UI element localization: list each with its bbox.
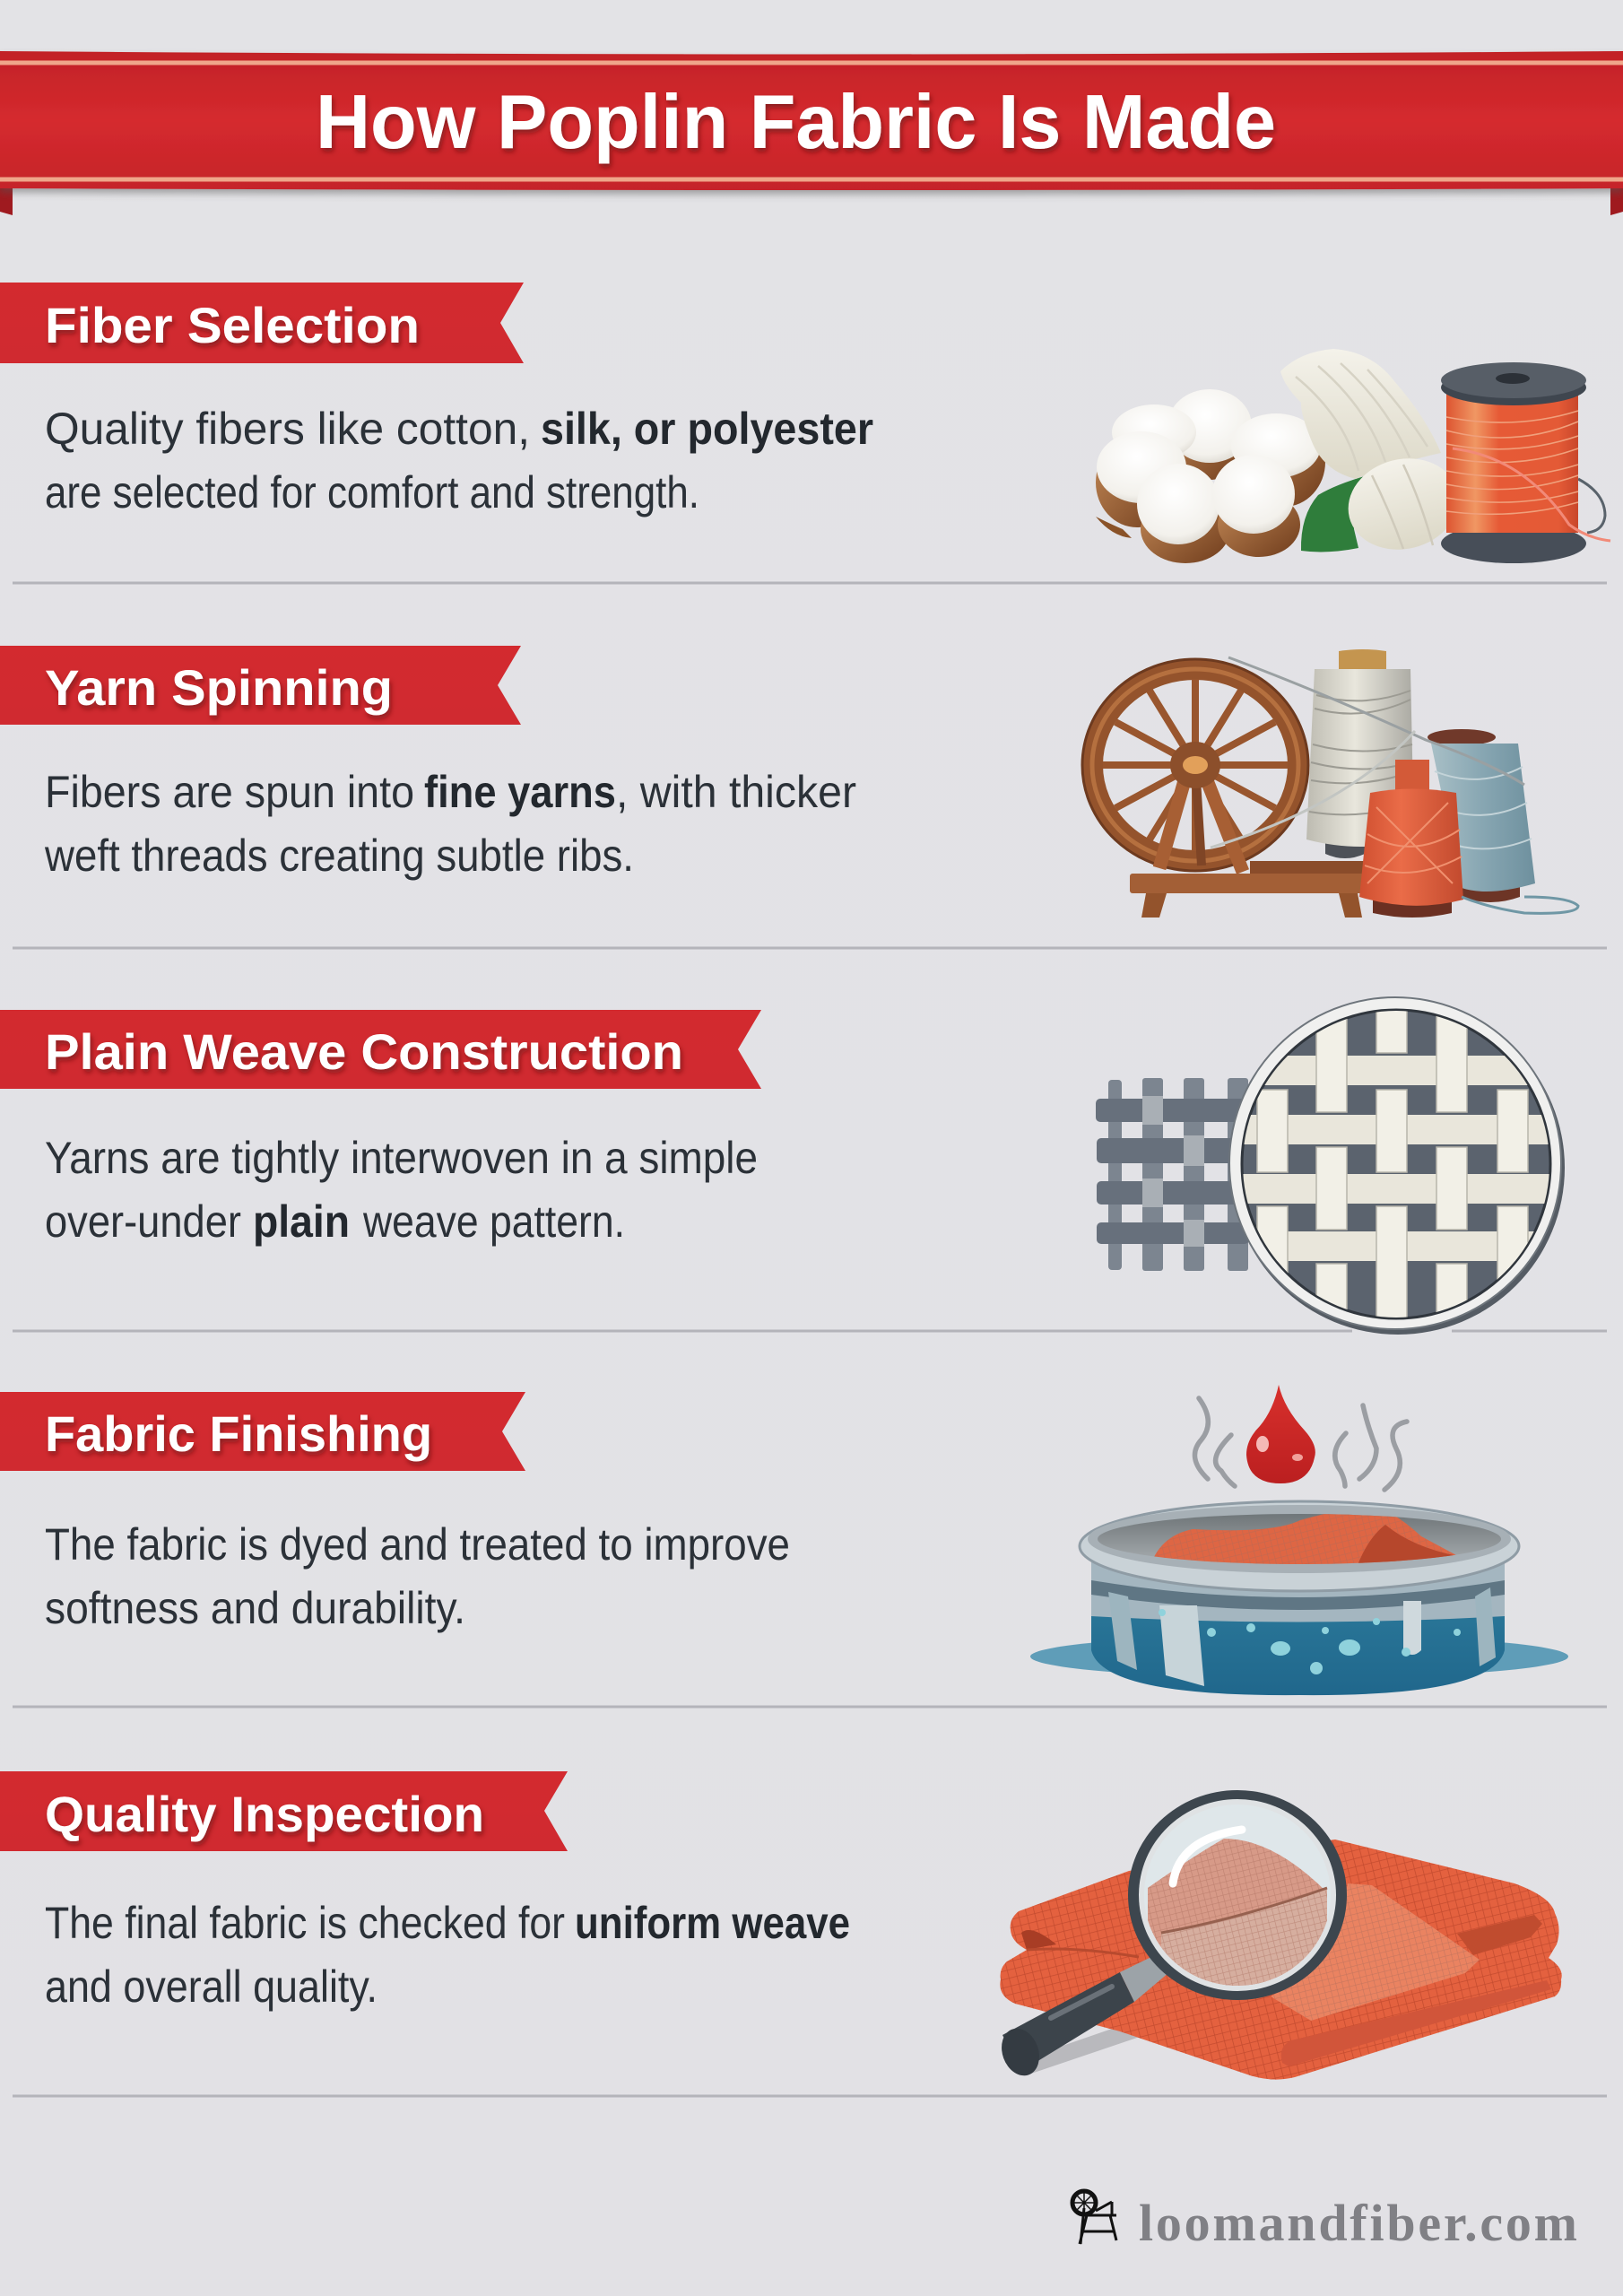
description text: The fabric is dyed and treated to improve [45, 1519, 790, 1570]
title banner [0, 51, 1623, 215]
description text [45, 1519, 790, 1633]
description text: weft threads creating subtle ribs. [44, 831, 634, 881]
description text: , with thicker [616, 767, 856, 817]
description text: weave pattern. [362, 1196, 625, 1247]
heading ribbon: Fabric Finishing [0, 1392, 525, 1471]
description text: uniform weave [575, 1898, 850, 1948]
panel: fiber selection [0, 283, 1610, 563]
heading ribbon: Fiber Selection: Fiber Selection [45, 297, 420, 353]
title text: How Poplin Fabric Is Made [316, 80, 1276, 165]
icon: woven mesh with magnified circle [1096, 996, 1565, 1335]
icon: magnifying glass over folded fabric [995, 1790, 1562, 2081]
description text [45, 404, 873, 517]
heading ribbon: Fabric Finishing: Fabric Finishing [45, 1405, 432, 1462]
panel: fabric finishing [0, 1385, 1568, 1695]
heading ribbon: Plain Weave Construction [0, 1010, 761, 1089]
heading ribbon: Quality Inspection: Quality Inspection [45, 1786, 484, 1842]
heading ribbon: Quality Inspection [0, 1771, 568, 1851]
description text: plain [253, 1196, 350, 1247]
heading ribbon: Yarn Spinning [0, 646, 521, 725]
description text: Quality fibers like cotton, [45, 404, 530, 454]
heading ribbon: Plain Weave Construction: Plain Weave Construction [45, 1023, 683, 1080]
description text: softness and durability. [45, 1583, 465, 1633]
description text: silk, or polyester [541, 404, 873, 454]
website text: loomandfiber.com [1139, 2194, 1577, 2252]
description text [45, 1898, 850, 2012]
panel: plain weave construction [0, 996, 1565, 1335]
description text: are selected for comfort and strength. [45, 467, 699, 517]
heading ribbon: Yarn Spinning: Yarn Spinning [45, 659, 393, 716]
icon: dye drop, steam and washing tub [1030, 1385, 1568, 1695]
panel: quality inspection [0, 1771, 1562, 2081]
icon: spinning wheel logo [1072, 2191, 1116, 2244]
panel: yarn spinning [0, 646, 1578, 918]
description text: and overall quality. [45, 1961, 378, 2012]
footer brand [1072, 2191, 1577, 2252]
description text: The final fabric is checked for [45, 1898, 565, 1948]
description text: Yarns are tightly interwoven in a simple [45, 1133, 758, 1183]
description text [44, 767, 856, 881]
description text [45, 1133, 758, 1247]
heading ribbon: Fiber Selection [0, 283, 524, 363]
description text: fine yarns [424, 767, 616, 817]
icon: cotton boll, cocoons and thread spool [1096, 349, 1610, 563]
icon: spinning wheel and yarn cones [1082, 649, 1578, 918]
description text: over-under [45, 1196, 241, 1247]
description text: Fibers are spun into [45, 767, 414, 817]
